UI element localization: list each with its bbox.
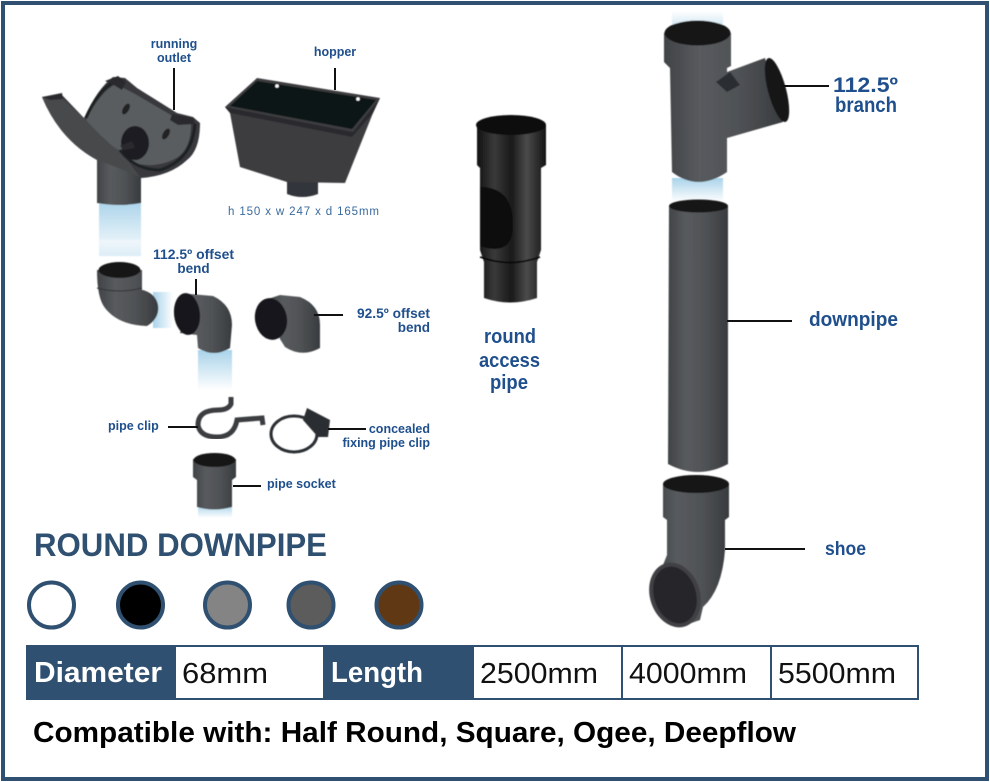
icon: pipe socket xyxy=(193,453,236,518)
label: concealed fixing pipe clip xyxy=(342,422,430,450)
icon: hopper xyxy=(225,78,380,197)
label: 92.5 offset bend xyxy=(357,306,430,335)
label: 112.5 branch: 112.5º xyxy=(833,74,898,97)
label: 112.5 branch xyxy=(833,74,898,117)
label: running outlet: outlet xyxy=(157,51,192,65)
label: pipe clip: pipe clip xyxy=(108,419,159,433)
heading: ROUND DOWNPIPE xyxy=(34,527,327,563)
spec table: 68mm xyxy=(182,658,268,690)
label: running outlet xyxy=(151,37,197,65)
label: 112.5 offset bend: 112.5º offset xyxy=(153,247,235,262)
icon: 112.5 left bend xyxy=(97,240,173,328)
compatibility note: Compatible with: Half Round, Square, Ogee, Deepflow xyxy=(33,717,796,749)
spec table: 4000mm xyxy=(629,658,747,690)
spec table: 2500mm xyxy=(480,658,598,690)
label: round access pipe: round xyxy=(484,326,536,348)
icon: 112.5 branch xyxy=(664,11,794,202)
spec table: Length xyxy=(331,657,423,689)
label: round access pipe xyxy=(479,326,540,394)
label: running outlet: running xyxy=(151,37,197,51)
label: round access pipe: pipe xyxy=(490,372,528,394)
colour swatches xyxy=(29,582,422,628)
icon: 92.5 offset bend xyxy=(252,295,320,353)
label: pipe socket: pipe socket xyxy=(267,477,337,491)
icon: pipe clip xyxy=(198,397,263,437)
spec table: Diameter xyxy=(34,657,162,689)
label: concealed fixing pipe clip: fixing pipe clip xyxy=(342,436,430,450)
icon: downpipe xyxy=(668,200,728,472)
label: 92.5 offset bend: 92.5º offset xyxy=(357,306,430,321)
label: 92.5 offset bend: bend xyxy=(398,320,430,335)
icon: 112.5 offset bend xyxy=(172,292,232,390)
leader lines xyxy=(168,68,829,549)
icon: concealed fixing pipe clip xyxy=(271,408,330,452)
icon: round access pipe xyxy=(476,115,546,302)
label: round access pipe: access xyxy=(479,350,540,372)
label: shoe: shoe xyxy=(825,539,866,560)
label: 112.5 offset bend: bend xyxy=(177,261,210,276)
icon: running outlet xyxy=(42,76,200,258)
icon: shoe xyxy=(641,475,729,634)
spec table: 5500mm xyxy=(778,658,896,690)
label: hopper dimensions: h 150 x w 247 x d 165mm xyxy=(228,206,379,218)
spec table xyxy=(26,645,919,700)
label: 112.5 branch: branch xyxy=(835,94,897,117)
label: hopper: hopper xyxy=(314,45,356,59)
label: 112.5 offset bend xyxy=(153,247,235,276)
label: downpipe: downpipe xyxy=(809,309,898,331)
label: concealed fixing pipe clip: concealed xyxy=(369,422,430,436)
